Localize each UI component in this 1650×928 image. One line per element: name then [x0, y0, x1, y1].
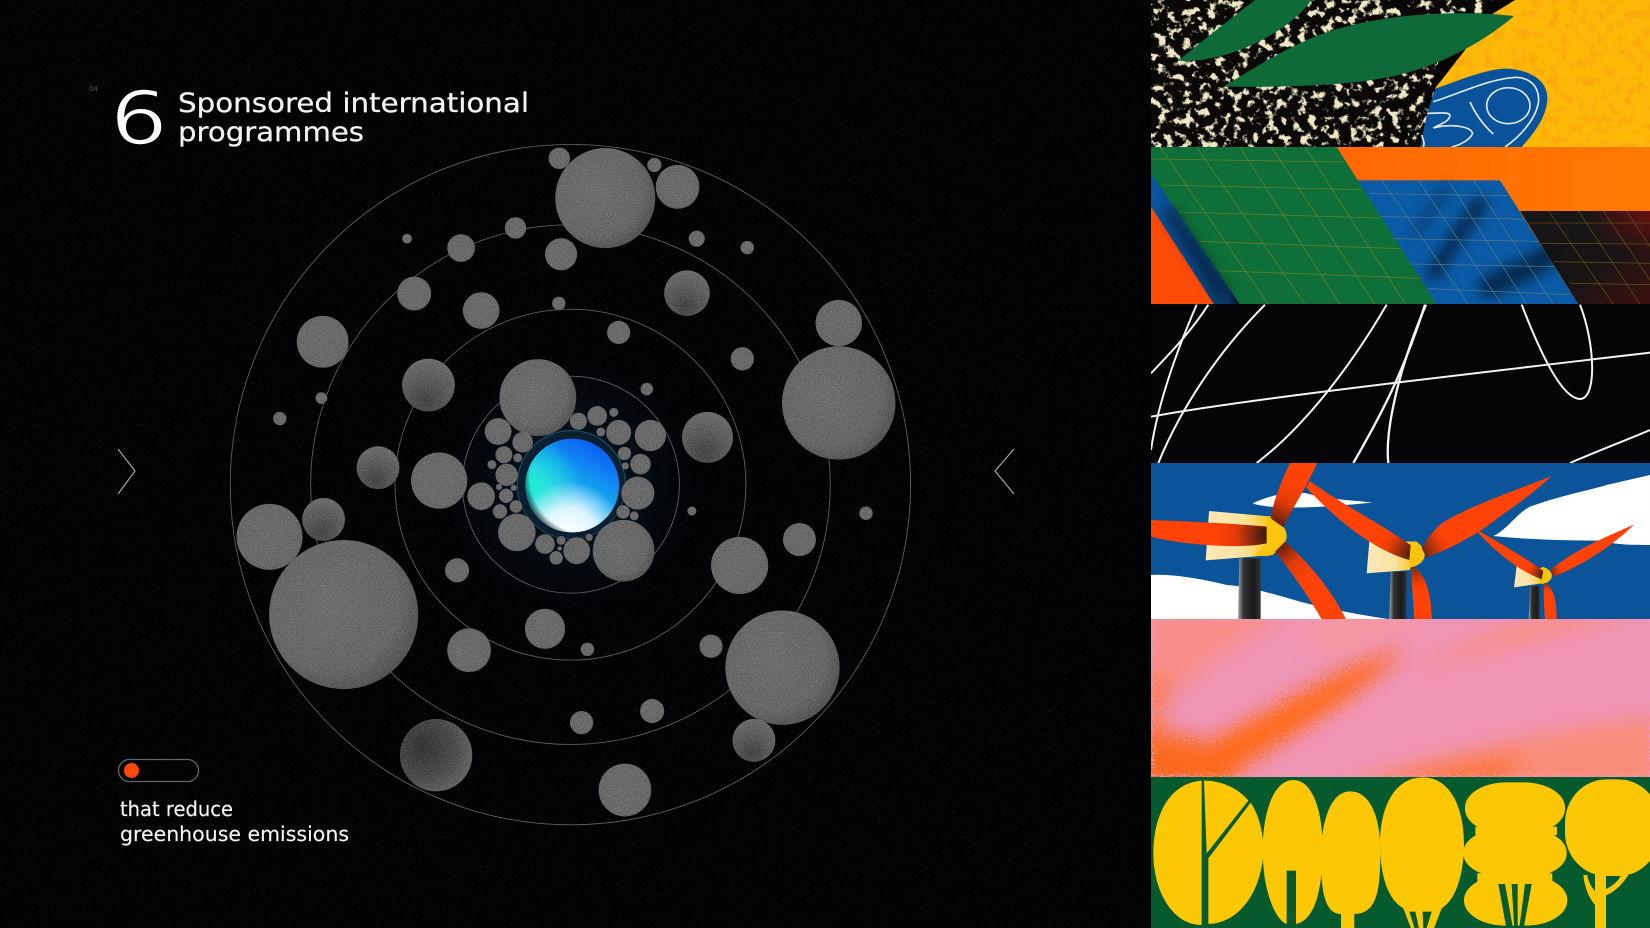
heading: Sponsored international: [178, 88, 529, 119]
centre glow: [442, 355, 701, 614]
blue panel: [1357, 180, 1578, 304]
shadow wedge: [1430, 0, 1506, 88]
heading: programmes: [178, 117, 364, 148]
blue blob: [1421, 69, 1547, 147]
yellow hill: [1435, 0, 1650, 147]
turbine middle: [1306, 476, 1552, 619]
central glowing sphere: [525, 439, 619, 532]
left edge black bar of illustration column: [1140, 0, 1151, 928]
dark smudges: [1170, 187, 1547, 293]
turbine large: [1151, 463, 1346, 619]
green panel: [1151, 147, 1437, 304]
leaf top: [1178, 0, 1312, 61]
blue edge band: [1151, 172, 1240, 304]
orbit rings: [230, 144, 911, 825]
panel: illustration strip wind turbines: [1151, 463, 1650, 619]
page number: 04: [89, 85, 98, 93]
tree 6: [1565, 779, 1650, 928]
tree 2: [1263, 780, 1323, 924]
headline number: 6: [110, 76, 168, 162]
orange triangle: [1151, 207, 1214, 304]
tree 5: [1463, 782, 1567, 928]
arrow: right chevron: [995, 449, 1014, 494]
speckled texture: [1151, 0, 1499, 147]
programme spheres: [237, 148, 895, 816]
toggle caption: that reduce: [120, 797, 233, 821]
leaf large: [1223, 13, 1514, 87]
sprayed orange clouds: [1151, 619, 1650, 777]
orange background: [1151, 147, 1650, 304]
toggle caption: greenhouse emissions: [120, 822, 349, 846]
tree 3: [1321, 791, 1380, 928]
tree 4: [1380, 777, 1464, 928]
panel: illustration strip pink sky: [1151, 619, 1650, 777]
panel: illustration strip solar panels: [1151, 147, 1650, 304]
chart: orbit diagram with programme spheres: [230, 144, 911, 825]
clouds: [1151, 475, 1650, 619]
tree 1: [1153, 781, 1263, 925]
arrow: left chevron: [118, 449, 135, 494]
white scribble: [1422, 77, 1539, 147]
blue panel grid: [1370, 180, 1570, 304]
dark panel: [1520, 211, 1650, 304]
starfield: [0, 0, 1151, 928]
panel: illustration strip yellow trees: [1151, 777, 1650, 928]
dark panel grid: [1528, 211, 1650, 304]
green grid: [1151, 147, 1420, 304]
panel: illustration strip white lines: [1151, 304, 1650, 463]
toggle switch: [118, 760, 198, 782]
turbine small: [1473, 524, 1634, 619]
panel: illustration strip leaves: [1151, 0, 1650, 147]
inner sphere halo: [518, 432, 625, 539]
